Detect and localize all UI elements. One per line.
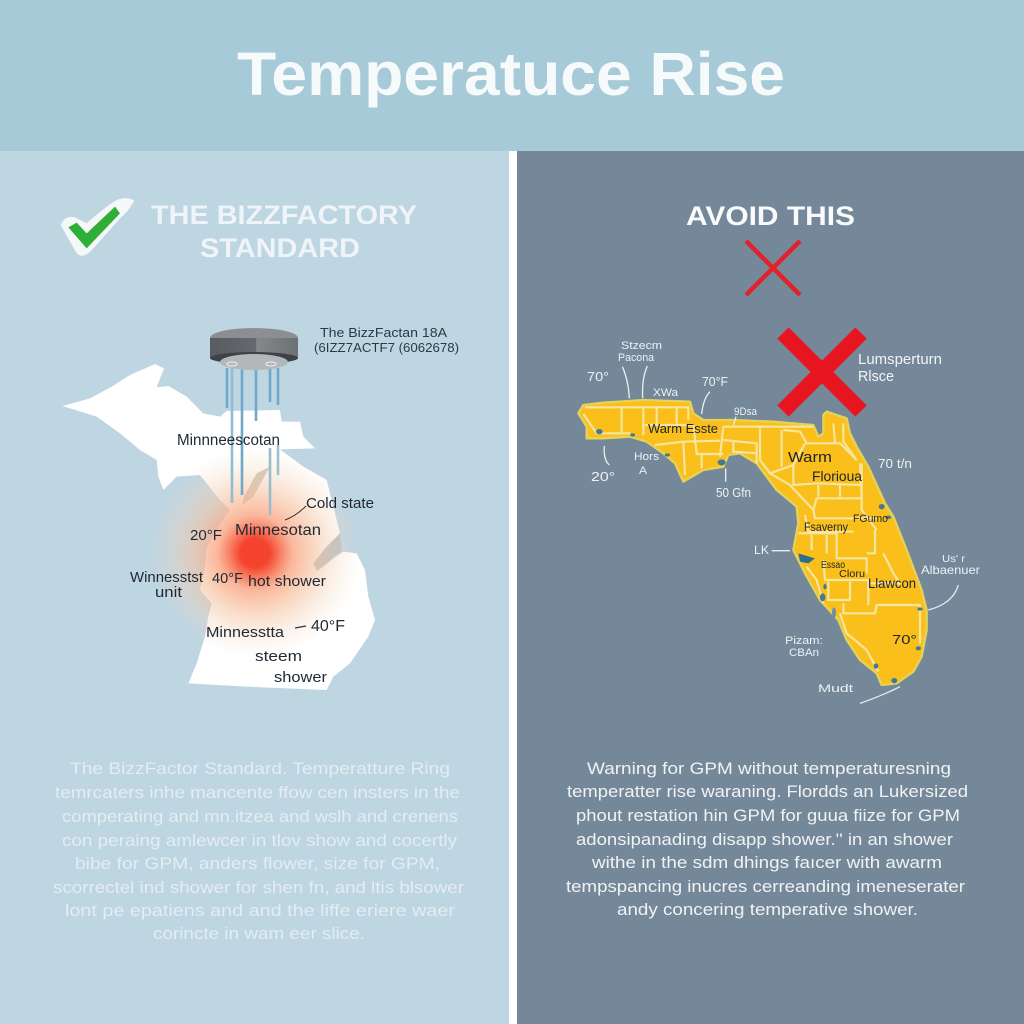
label: temperature rise: Lumsperturn <box>858 351 942 368</box>
body text: left: temrcaters inhe mancente ffow cen insters in the <box>55 783 460 802</box>
panel: the bizzfactory standard <box>0 151 509 1024</box>
body text: left: lont pe epatiens and and the liffe eriere waer <box>65 901 455 920</box>
map labels: left <box>130 432 374 686</box>
map labels: dark on yellow: Cloru <box>839 569 865 580</box>
map labels: white callouts: CBAn <box>789 647 819 659</box>
map labels: left: hot shower <box>248 574 326 590</box>
body text: right: andy concering temperative shower. <box>617 900 918 919</box>
label: temperature rise <box>858 351 942 385</box>
body text: left <box>53 759 464 943</box>
map labels: dark on yellow: 70° <box>892 632 917 647</box>
icon: shower head <box>210 328 298 370</box>
body text: right <box>566 759 968 919</box>
label: temperature rise: Rlsce <box>858 368 894 385</box>
map labels: white callouts: Stzecm <box>621 340 662 352</box>
body text: right: Warning for GPM without temperaturesning <box>587 759 951 778</box>
map labels: left: Minnesotan <box>235 522 321 539</box>
map labels: white callouts: Pizam: <box>785 635 823 647</box>
map labels: dark on yellow: FGumo <box>853 513 888 525</box>
map labels: white callouts: 20° <box>591 469 615 484</box>
map labels: white callouts: 9Dsa <box>734 406 758 418</box>
map labels: white callouts: 70°F <box>702 374 728 389</box>
map labels: white callouts: 50 Gfn <box>716 485 751 500</box>
body text: right: withe in the sdm dhings faıcer with awarm <box>591 853 942 872</box>
map labels: left: Minnneescotan <box>177 432 280 449</box>
map labels: left: Cold state <box>306 496 374 512</box>
map labels: left: unit <box>155 585 182 601</box>
body text: right: adonsipanading disapp shower.'' in an shower <box>576 830 953 849</box>
map labels: white callouts <box>587 340 980 695</box>
map labels: left: Winnesstst <box>130 570 203 586</box>
panel: avoid this <box>517 151 1024 1024</box>
map labels: dark on yellow: Essao <box>821 560 845 571</box>
body text: right: phout restation hin GPM for guua fiize for GPM <box>576 806 960 825</box>
icon: large red cross <box>783 333 861 411</box>
map labels: white callouts: 70 t/n <box>878 456 912 471</box>
map labels: left: 20°F <box>190 528 222 544</box>
body text: left: bibe for GPM, anders flower, size for GPM, <box>75 854 440 873</box>
label: shower head model: (6IZZ7ACTF7 (6062678) <box>314 341 459 355</box>
body text: left: con peraing amlewcer in tlov show and cocertly <box>62 831 458 850</box>
map labels: white callouts: Us' r <box>942 554 966 565</box>
body text: left: comperating and mn.itzea and wslh and crenens <box>62 807 458 826</box>
map labels: left: Minnesstta <box>206 625 285 641</box>
body text: left: corincte in wam eer slice. <box>153 924 365 943</box>
map labels: white callouts: Mudt <box>818 683 853 695</box>
map labels: white callouts: 70° <box>587 369 609 384</box>
map labels: dark on yellow: Warm <box>788 450 832 466</box>
body text: left: scorrectel ind shower for shen fn, and ltis blsower <box>53 878 464 897</box>
map labels: white callouts: LK <box>754 543 769 557</box>
body text: right: tempspancing inucres cerreanding imeneserater <box>566 877 965 896</box>
heading: the bizzfactory standard <box>151 200 417 263</box>
icon: shower water streams <box>227 368 278 515</box>
map labels: white callouts: Pacona <box>618 352 655 364</box>
body text: right: temperatter rise waraning. Flordds an Lukersized <box>567 782 968 801</box>
map labels: white callouts: Albaenuer <box>921 563 980 577</box>
leader lines <box>604 366 958 703</box>
map labels: dark on yellow: Florioua <box>812 468 862 484</box>
map labels: left: 40°F <box>212 571 243 587</box>
icon: green check mark <box>61 198 134 256</box>
map labels: dark on yellow <box>648 421 917 647</box>
coastal details <box>596 429 923 683</box>
map labels: white callouts: XWa <box>653 387 679 399</box>
label: shower head model: The BizzFactan 18A <box>320 326 448 340</box>
map labels: left: shower <box>274 670 327 686</box>
icon: small red cross <box>746 241 800 295</box>
title: Temperatuce Rise <box>237 40 785 108</box>
map: white state with heat spot <box>62 364 375 690</box>
map labels: white callouts: A <box>639 465 648 477</box>
map labels: dark on yellow: Warm Esste <box>648 421 718 436</box>
heading: avoid this: AVOID THIS <box>686 201 855 231</box>
header band <box>0 0 1024 151</box>
heading: the bizzfactory standard: STANDARD <box>200 233 360 263</box>
map labels: white callouts: Hors <box>634 451 660 463</box>
map: yellow state with county lines <box>578 400 927 685</box>
heading: the bizzfactory standard: THE BIZZFACTORY <box>151 200 417 230</box>
map labels: left: steem <box>255 649 302 665</box>
divider <box>509 151 517 1024</box>
map labels: dark on yellow: Fsaverny <box>804 520 848 534</box>
map labels: left: 40°F <box>311 618 345 635</box>
label: shower head model <box>314 326 459 355</box>
map labels: dark on yellow: Llawcon <box>868 575 916 591</box>
body text: left: The BizzFactor Standard. Temperatture Ring <box>70 759 450 778</box>
